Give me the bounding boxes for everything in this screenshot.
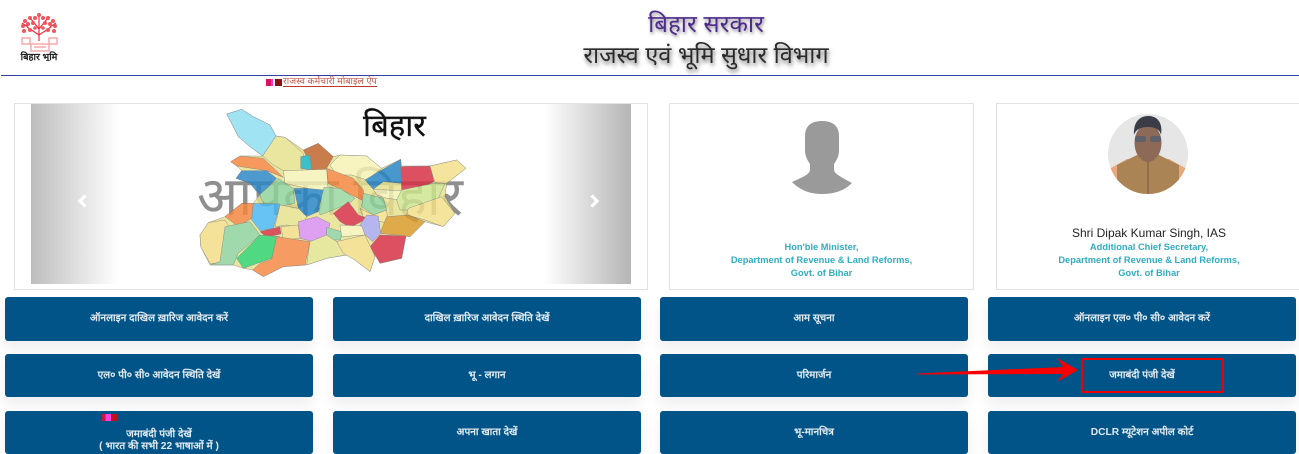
button: my account: अपना खाता देखें (457, 427, 517, 438)
caption: minister designation: Hon'ble Minister, (784, 242, 858, 252)
button: online dakhil kharij (5, 297, 313, 341)
button: dakhil kharij status: दाखिल ख़ारिज आवेदन स्थिति देखें (425, 313, 549, 324)
caption: officer designation: Govt. of Bihar (1118, 268, 1180, 278)
caption: officer designation (1058, 242, 1240, 278)
button: DCLR mutation appeal court (988, 411, 1296, 454)
button: parimarjan (660, 354, 968, 397)
panel: Bihar map carousel (14, 103, 648, 290)
icon: new badge (102, 414, 117, 421)
icon: new badge (266, 79, 282, 86)
icon: person silhouette (792, 121, 852, 194)
link text: राजस्व कर्मचारी मोबाइल ऐप (283, 76, 377, 86)
button: LPC status: एल० पी० सी० आवेदन स्थिति देखें (98, 370, 220, 381)
caption: minister designation: Department of Revenue & Land Reforms, (731, 255, 912, 265)
button: general notice: आम सूचना (794, 313, 834, 324)
map of Bihar (197, 108, 466, 277)
button: land rent (333, 354, 641, 397)
button: DCLR mutation appeal court: DCLR म्यूटेशन अपील कोर्ट (1091, 427, 1193, 438)
caption: minister designation: Govt. of Bihar (791, 268, 852, 278)
officer name: Shri Dipak Kumar Singh, IAS (1072, 226, 1226, 240)
mobile app link (266, 76, 377, 87)
button: land map: भू-मानचित्र (794, 427, 834, 438)
button: jamabandi in 22 languages: जमाबंदी पंजी देखें (126, 429, 192, 440)
title: department name: राजस्व एवं भूमि सुधार विभाग (583, 42, 829, 68)
callout: red highlight box (1081, 358, 1224, 393)
button: online LPC (988, 297, 1296, 341)
caption: officer designation: Additional Chief Secretary, (1090, 242, 1208, 252)
arrow: red pointer (917, 358, 1078, 382)
watermark text: आपका बिहार (197, 166, 464, 227)
title: Bihar Sarkar: बिहार सरकार (648, 11, 764, 38)
button: jamabandi in 22 languages: ( भारत की सभी 22 भाषाओं में ) (99, 441, 219, 452)
caption: minister designation (731, 242, 912, 278)
button: view jamabandi register (988, 354, 1296, 397)
panel: Hon'ble Minister (669, 103, 974, 290)
button: land map (660, 411, 968, 454)
button: online LPC: ऑनलाइन एल० पी० सी० आवेदन करें (1074, 313, 1210, 324)
logo: Bihar Bhumi emblem (20, 13, 59, 61)
button: parimarjan: परिमार्जन (797, 370, 831, 381)
carousel arrow right (590, 194, 599, 208)
button: view jamabandi register: जमाबंदी पंजी देखें (1109, 370, 1175, 381)
button: land rent: भू - लगान (468, 370, 506, 381)
carousel arrow left (78, 194, 86, 208)
header rule (1, 75, 1299, 76)
button: dakhil kharij status (333, 297, 641, 341)
button: LPC status (5, 354, 313, 397)
button: jamabandi in 22 languages (5, 411, 313, 454)
caption: officer designation: Department of Revenue & Land Reforms, (1058, 255, 1240, 265)
button: online dakhil kharij: ऑनलाइन दाखिल ख़ारिज आवेदन करें (90, 313, 228, 324)
panel: Additional Chief Secretary (996, 103, 1299, 290)
button: my account (333, 411, 641, 454)
map title: बिहार (363, 108, 427, 143)
carousel image (31, 104, 631, 284)
photo: officer portrait (1108, 114, 1188, 194)
button: general notice (660, 297, 968, 341)
